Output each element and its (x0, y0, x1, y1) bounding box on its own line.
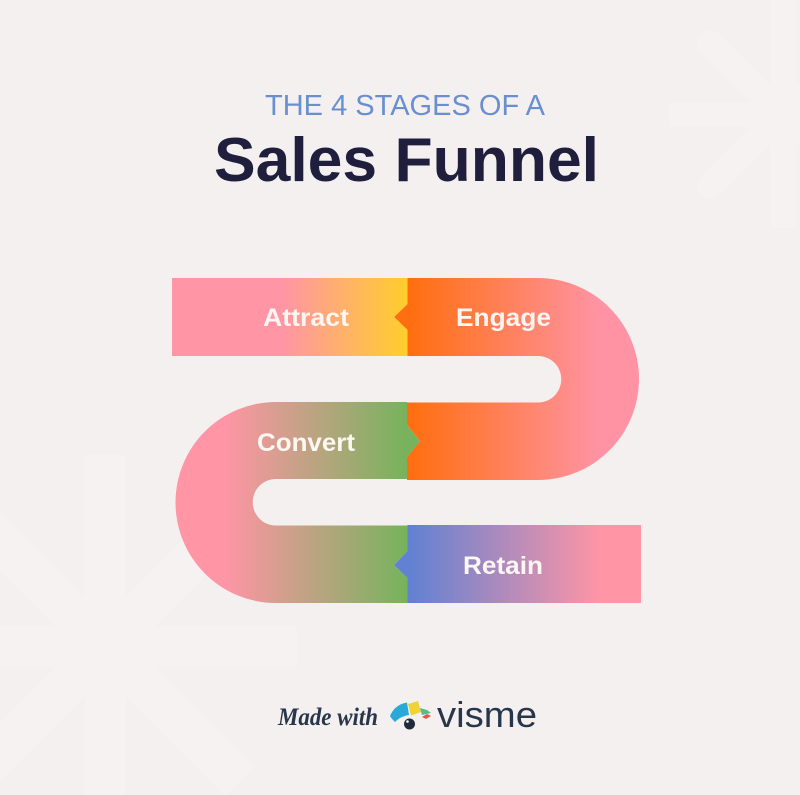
stage: engage (394, 278, 639, 480)
made with visme credit (277, 694, 537, 735)
main heading: Sales Funnel (214, 126, 599, 195)
icon: visme logo (390, 701, 431, 730)
stage: retain (394, 525, 641, 603)
stage: engage: Engage (456, 304, 551, 332)
stage: convert (175, 402, 420, 603)
subtitle: THE 4 STAGES OF A (265, 90, 546, 122)
decorative star: bottom left (0, 455, 297, 795)
stage: attract: Attract (263, 304, 350, 332)
stage: convert: Convert (257, 429, 356, 457)
stage: retain: Retain (463, 552, 543, 580)
made with script text: Made with (277, 704, 378, 731)
stage: attract (172, 278, 408, 356)
title (214, 90, 599, 195)
decorative star: top right (669, 0, 800, 228)
visme wordmark: visme (437, 694, 537, 735)
funnel path (172, 278, 641, 603)
